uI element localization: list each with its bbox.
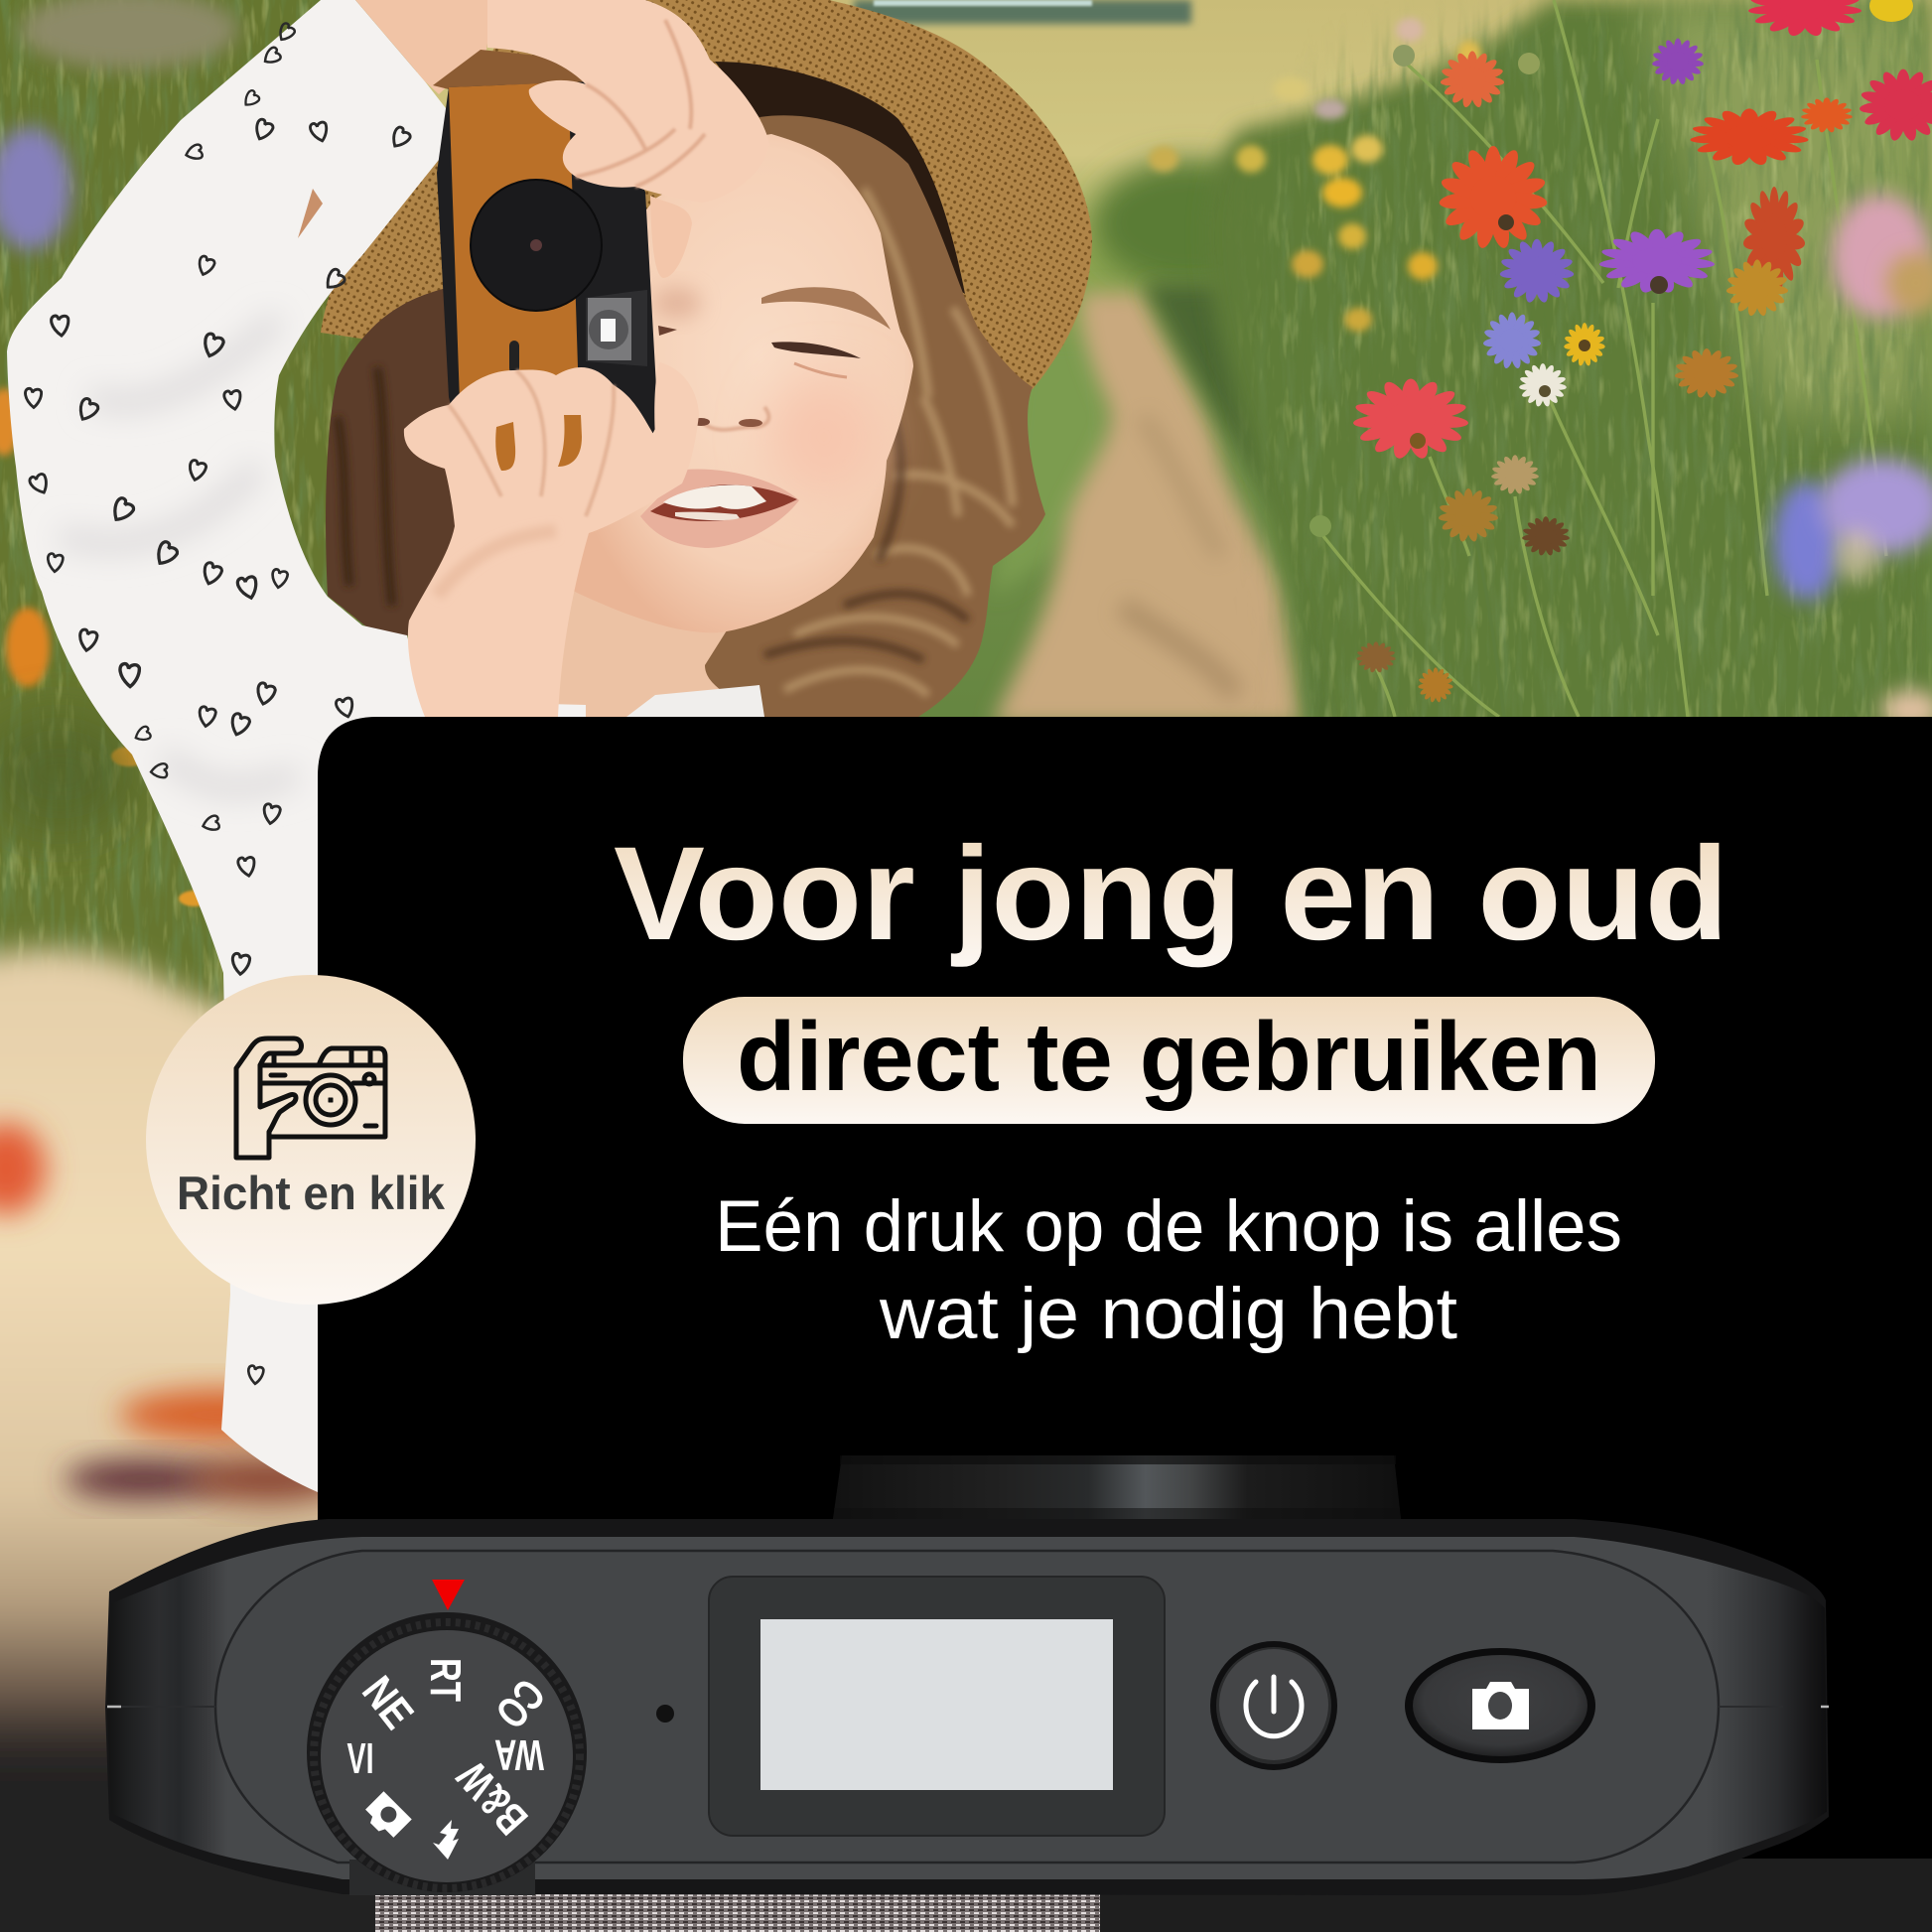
product camera top view (105, 1455, 1829, 1895)
upper hand (487, 0, 769, 278)
face (573, 134, 913, 632)
dial labels (347, 1658, 554, 1844)
smile (640, 470, 799, 548)
dial labels: CO (486, 1669, 554, 1737)
LCD screen (709, 1577, 1165, 1836)
blurred distant yellow flowers (1149, 18, 1481, 332)
photo: girl with camera (7, 0, 1092, 1492)
dial labels: RT (421, 1658, 470, 1702)
title: Voor jong en oud: Voor jong en oud (614, 820, 1728, 968)
eyebrow (761, 287, 891, 330)
trousers under camera (375, 1891, 1100, 1932)
blurred foreground flowers right (1773, 195, 1932, 730)
nose (703, 407, 768, 430)
flower stems (1315, 0, 1886, 717)
badge: Richt en klik: Richt en klik (177, 1167, 446, 1219)
dial icon: camera (361, 1791, 412, 1842)
hair (326, 62, 1045, 717)
white shirt with heart print (7, 0, 764, 1492)
shutter button (1405, 1648, 1595, 1763)
closed eye (771, 342, 861, 358)
left meadow (0, 0, 417, 1112)
green meadow right side (1209, 0, 1932, 717)
neck (477, 556, 794, 717)
mode dial (307, 1580, 587, 1895)
left eye shadow (658, 326, 677, 336)
dial labels: VI (347, 1734, 373, 1783)
red pointer triangle (432, 1580, 465, 1610)
blurred foreground flower lower left (0, 949, 437, 1932)
blurred dirt path (993, 283, 1390, 725)
dial labels: WA (494, 1730, 544, 1779)
lower hand (404, 362, 699, 717)
black text panel (318, 717, 1932, 1859)
power button (1210, 1641, 1337, 1770)
body central panel (215, 1551, 1719, 1863)
hat (321, 0, 1092, 397)
subtitle text: wat je nodig hebt (879, 1274, 1457, 1354)
small mic hole (656, 1705, 674, 1723)
heart print (25, 22, 412, 1384)
dial labels: NE (352, 1668, 423, 1738)
held retro camera (433, 50, 658, 467)
badge: Richt en klik (146, 975, 476, 1305)
dial labels: B&W (448, 1751, 537, 1844)
side seams (107, 1706, 1829, 1708)
wildflowers right side (1310, 0, 1932, 703)
highlighted pill: direct te gebruiken: direct te gebruiken (737, 1002, 1601, 1111)
top shutter dial (833, 1455, 1401, 1519)
icon: hand holding camera (236, 1038, 385, 1158)
dial icon: flash (433, 1820, 459, 1860)
bottom dark strip (1092, 1859, 1932, 1932)
field and far horizon (0, 0, 1932, 774)
camera body outer shell (105, 1519, 1829, 1895)
forearm and wrist (355, 0, 494, 94)
subtitle text: Eén druk op de knop is alles (715, 1186, 1622, 1267)
subtitle text (715, 1186, 1622, 1354)
body lighter face with side shading (107, 1537, 1827, 1879)
dark hat underside (715, 62, 965, 294)
